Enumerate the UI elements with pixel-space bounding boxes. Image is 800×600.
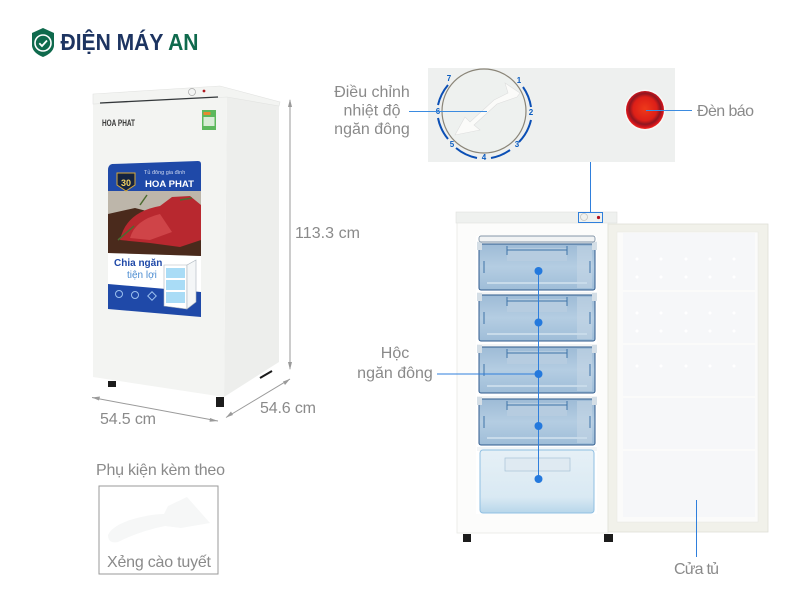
indicator lamp <box>624 90 666 130</box>
dial numbers: 1 <box>517 76 522 85</box>
depth dimension arrow <box>226 379 290 418</box>
drawer 4 <box>477 396 597 445</box>
poster: tiện lợi <box>127 270 157 281</box>
compartment <box>476 236 597 514</box>
accessory box: ice scraper <box>99 486 218 574</box>
dial knob <box>442 69 526 153</box>
poster heading: Chia ngăn <box>114 258 162 269</box>
callout line: dial <box>409 110 487 112</box>
dial numbers: 5 <box>450 140 455 149</box>
drawer 1 rail <box>479 236 595 242</box>
energy label <box>202 110 216 130</box>
freezer side <box>224 96 279 397</box>
drawer 5 <box>477 447 597 513</box>
dial numbers: 3 <box>515 140 520 149</box>
feet <box>463 534 613 542</box>
poster <box>108 161 201 317</box>
cabinet <box>457 222 608 533</box>
logo: Điện Máy An <box>32 28 199 57</box>
mini icons <box>116 290 156 300</box>
icon: shield with check <box>32 28 54 57</box>
control highlight <box>578 212 602 222</box>
drawer 2 <box>477 292 597 341</box>
photo of meat <box>108 191 201 256</box>
freezer lid <box>93 86 280 106</box>
door dots <box>636 258 736 368</box>
depth label: 54.6 cm <box>260 400 316 417</box>
accessories heading: Phụ kiện kèm theo <box>96 462 225 479</box>
drawer 3 <box>477 344 597 393</box>
mini open freezer <box>164 260 196 309</box>
door panels <box>623 233 755 517</box>
knob arrow <box>455 83 520 135</box>
drawer label <box>357 345 433 382</box>
callout line: door <box>696 500 698 557</box>
dial label <box>334 84 410 138</box>
brand name: ĐIỆN MÁY AN <box>60 28 199 55</box>
connector: panel to freezer <box>590 162 592 212</box>
door <box>608 224 768 532</box>
drawer 1 <box>477 241 597 290</box>
freezer front <box>93 96 227 397</box>
dial numbers: 2 <box>529 108 534 117</box>
callout line: lamp <box>646 110 692 112</box>
callout: drawers <box>437 267 542 483</box>
icon: ice scraper <box>108 497 210 542</box>
control panel close-up <box>428 68 675 162</box>
front logo: HOA PHAT <box>102 118 135 128</box>
closed freezer product <box>93 86 280 407</box>
badge 30 years <box>117 173 135 191</box>
dial scale <box>438 85 531 158</box>
open freezer product <box>456 212 768 542</box>
door label: Cửa tủ <box>674 561 719 578</box>
height dimension arrow <box>288 99 292 370</box>
width dimension arrow <box>92 396 218 422</box>
blue band <box>108 284 201 317</box>
poster: HOA PHAT <box>145 179 194 190</box>
dial label: Điều chỉnh <box>334 84 410 101</box>
height label: 113.3 cm <box>295 225 360 242</box>
accessory label: Xẻng cào tuyết <box>107 554 212 571</box>
dial numbers: 6 <box>436 107 441 116</box>
dial numbers <box>436 74 534 162</box>
drawer label: ngăn đông <box>357 365 433 382</box>
dial label: nhiệt độ <box>344 102 401 120</box>
lamp label: Đèn báo <box>697 103 754 120</box>
badge 30 years: 30 <box>121 178 131 188</box>
dial numbers: 4 <box>482 153 487 162</box>
width label: 54.5 cm <box>100 411 156 428</box>
dial numbers: 7 <box>447 74 452 83</box>
poster brand: Tủ đông gia đình <box>144 169 185 176</box>
lid <box>456 212 617 223</box>
dial label: ngăn đông <box>334 121 410 138</box>
drawer label: Hộc <box>381 345 409 362</box>
freezer feet <box>108 371 272 407</box>
